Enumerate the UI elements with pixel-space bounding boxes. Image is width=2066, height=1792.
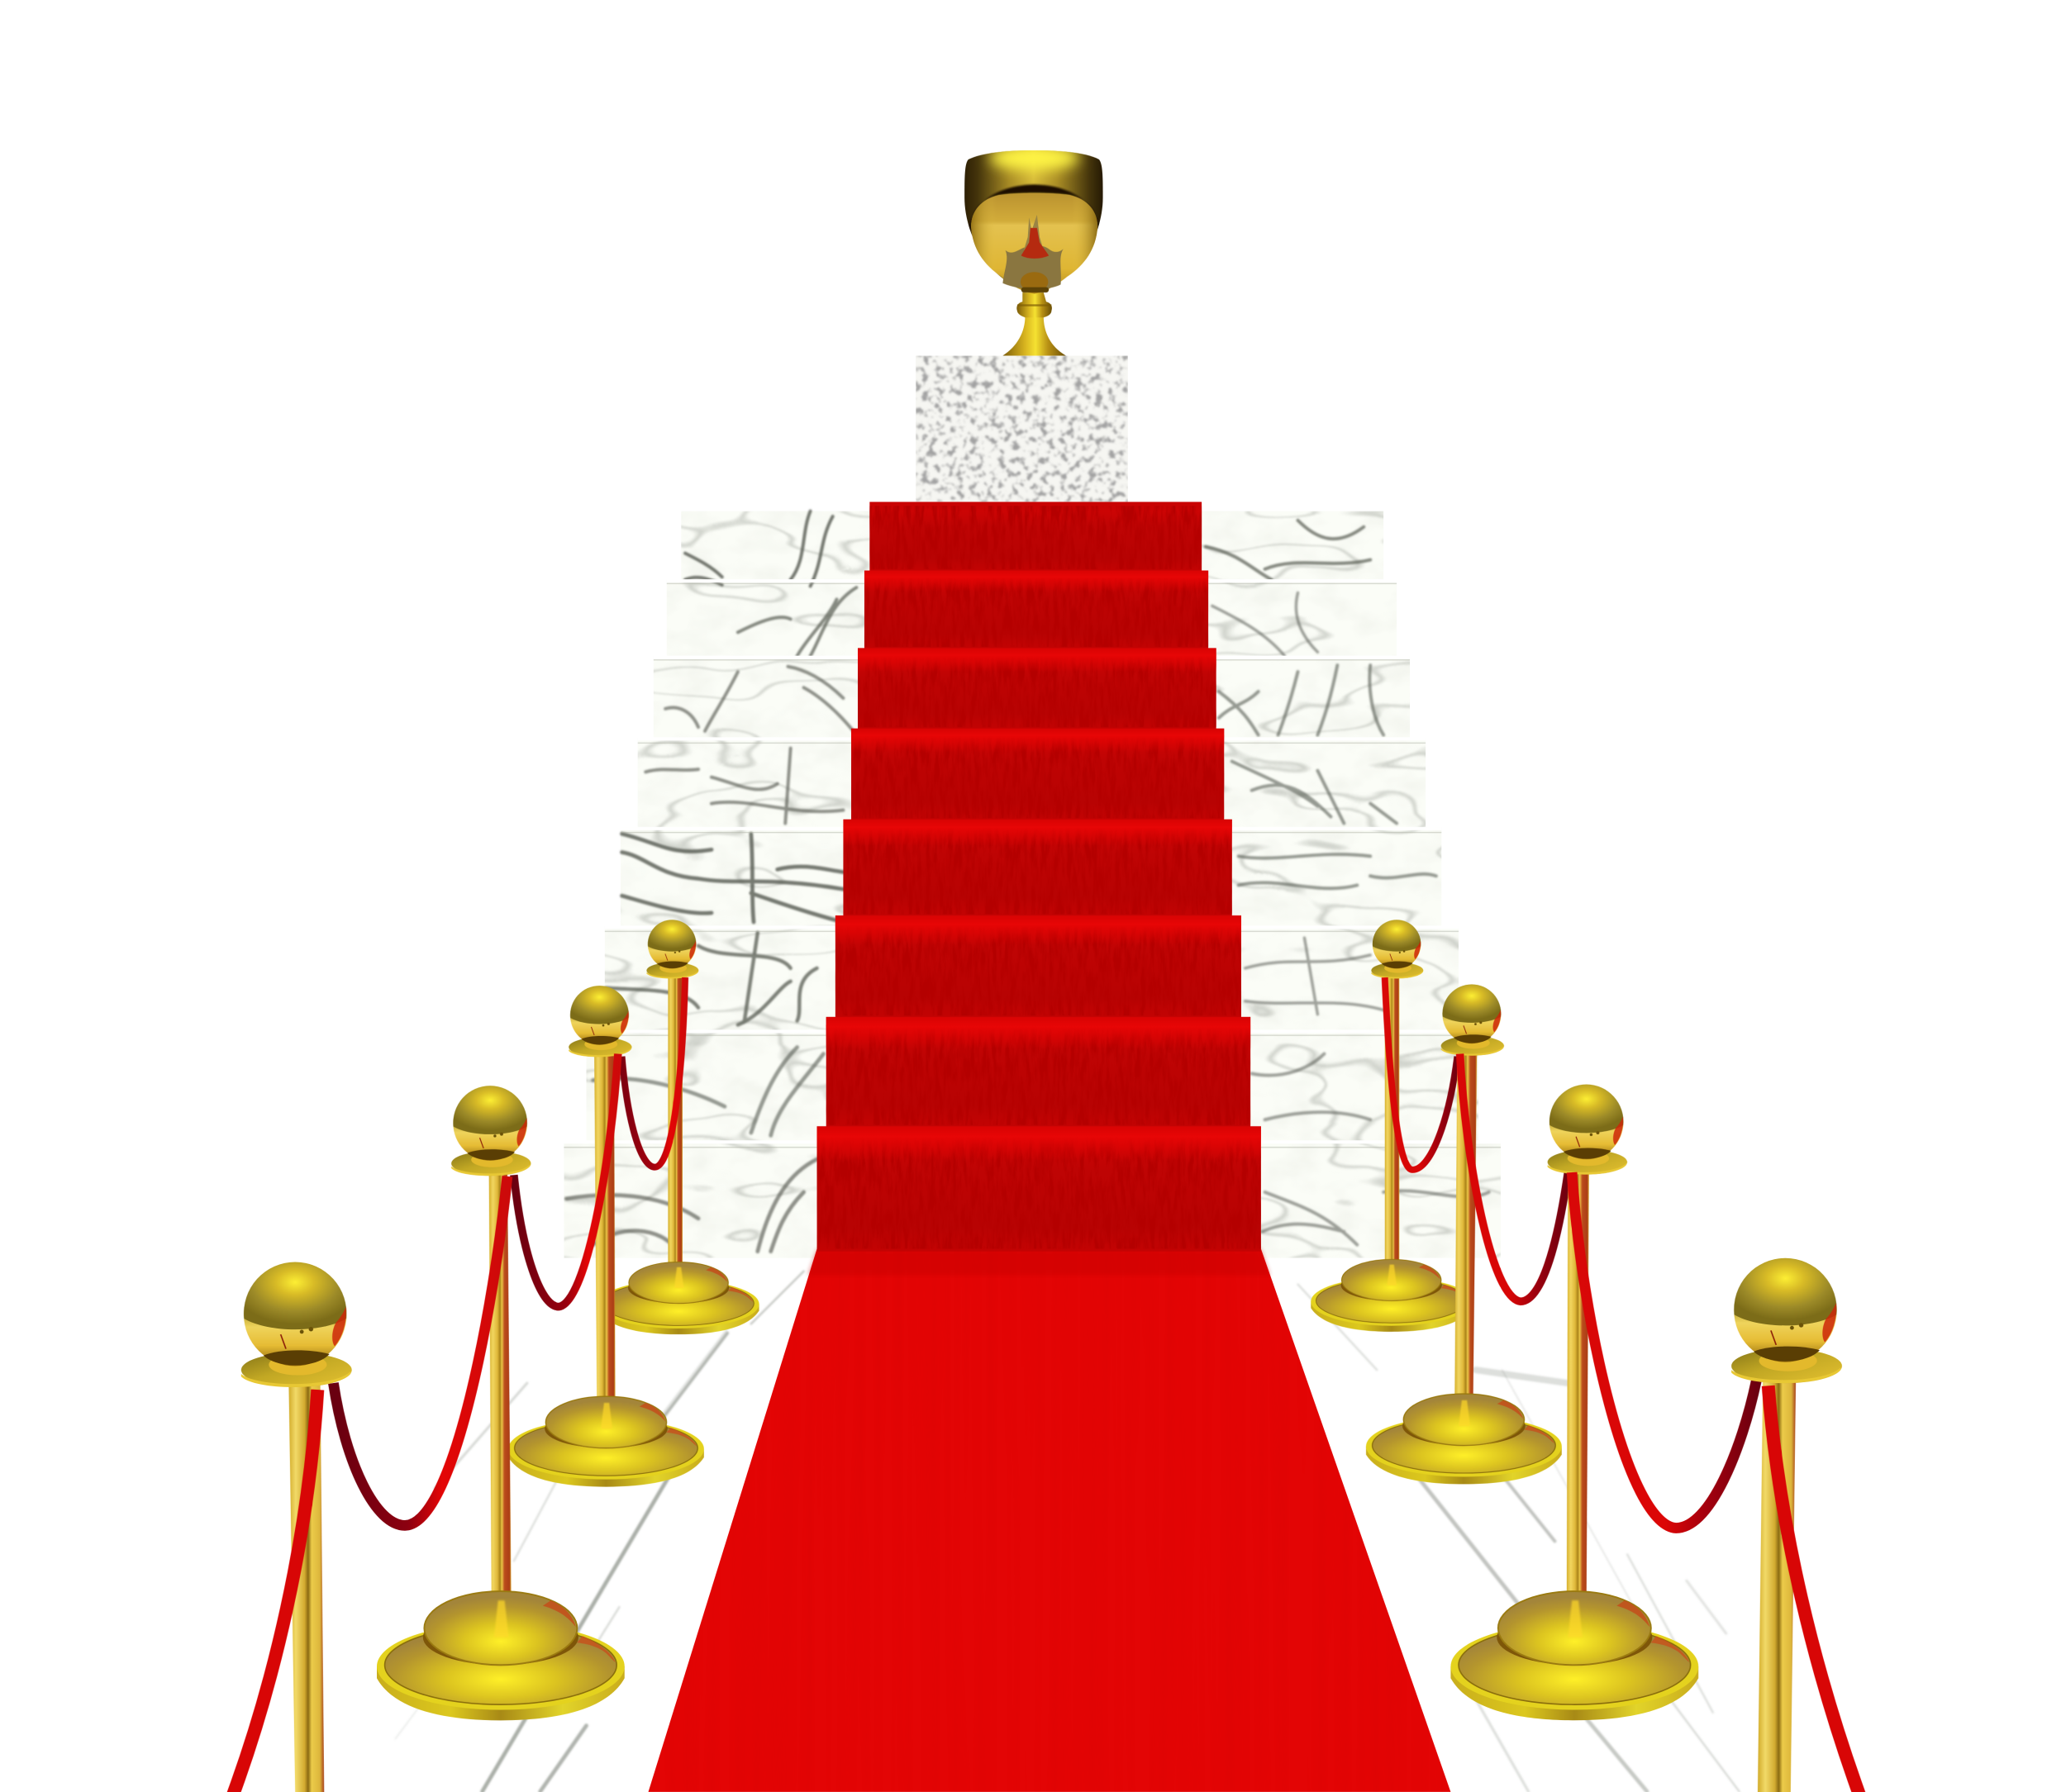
gold trophy: [964, 146, 1104, 355]
carpet stair treads: [817, 501, 1261, 1252]
granite pedestal: [916, 355, 1128, 501]
rope right far: [1385, 977, 1457, 1170]
left stanchion far: [598, 920, 759, 1334]
rope right near: [1572, 1172, 1756, 1528]
rope left middle: [514, 1054, 618, 1307]
marble floor with grey streaks: [395, 1272, 1740, 1791]
marble cracks: left side: [567, 511, 1489, 1252]
rope left near: [333, 1176, 507, 1525]
left stanchion second: [377, 1086, 625, 1720]
rope right middle: [1460, 1054, 1568, 1301]
carpet step nosing highlights: [817, 570, 1261, 1161]
left stanchion third: [508, 986, 704, 1487]
left stanchion front: [241, 1262, 352, 1792]
marble stair steps: [564, 511, 1501, 1258]
trophy foot and stem: [1002, 292, 1066, 355]
right stanchion far: [1311, 920, 1472, 1332]
rope left far: [622, 977, 685, 1167]
carpet floor runner: [648, 1248, 1450, 1792]
illustration: red carpet stairs leading to gold trophy: [226, 150, 1866, 1792]
rope right front: [1768, 1386, 1859, 1792]
right stanchion second: [1450, 1085, 1698, 1720]
reflection in the bowl: [1002, 215, 1064, 292]
step tread highlights: [564, 581, 1501, 1142]
trophy bowl: [964, 146, 1104, 294]
right stanchion third: [1366, 984, 1562, 1484]
red carpet flowing down the stairs: [648, 501, 1450, 1792]
right stanchion front: [1731, 1258, 1842, 1792]
carpet pile texture: [817, 506, 1261, 1248]
rope left front: [233, 1390, 317, 1792]
marble cracks: right side: [1206, 520, 1370, 580]
